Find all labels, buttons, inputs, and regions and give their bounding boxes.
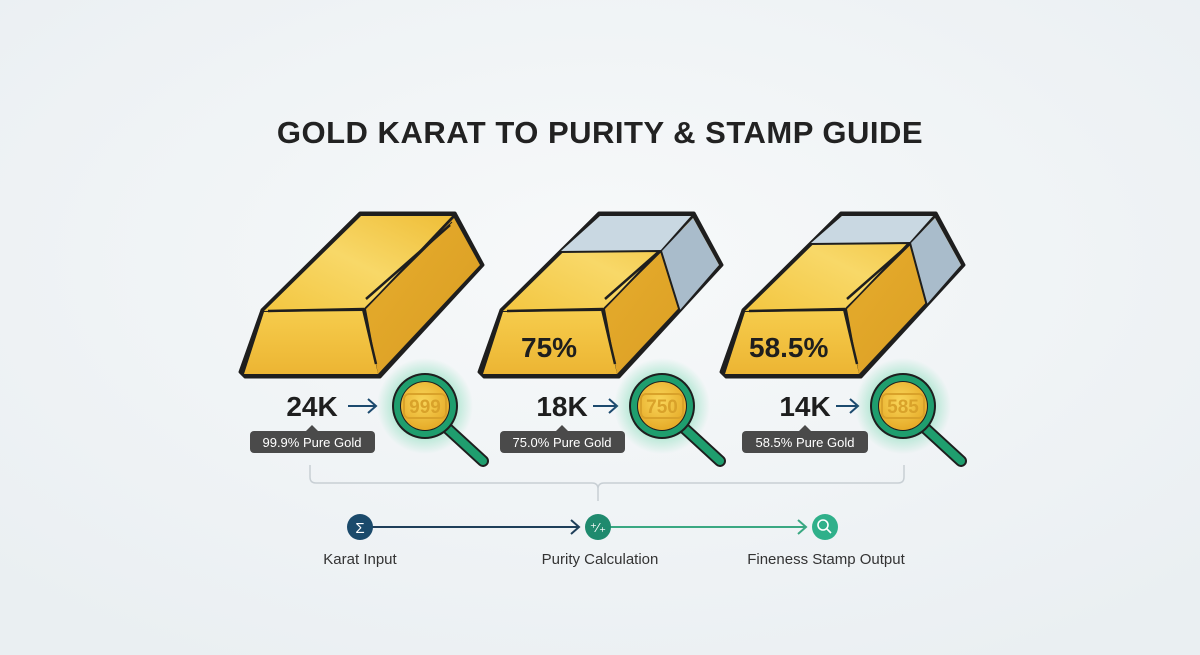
icon: gold bar 14K: 58.5% (749, 332, 828, 363)
panel: 24K bar (240, 213, 483, 461)
tag: 75.0% Pure Gold (500, 425, 625, 453)
icon: calculation (585, 514, 611, 540)
arrow (836, 399, 858, 413)
icon: magnifier 585 (855, 358, 961, 461)
icon: sigma: Σ (355, 520, 365, 537)
panel: 14K bar (721, 213, 964, 461)
tag: 58.5% Pure Gold (742, 425, 868, 453)
icon: search (812, 514, 838, 540)
label: Fineness Stamp Output: Fineness Stamp Output (747, 551, 906, 568)
tag: 58.5% Pure Gold: 58.5% Pure Gold (755, 435, 855, 450)
bracket (310, 465, 904, 501)
arrow (348, 399, 376, 413)
icon: calculation: ⁺∕₊ (590, 520, 606, 535)
tag: 99.9% Pure Gold (250, 425, 375, 453)
icon: sigma (347, 514, 373, 540)
icon: magnifier 750: 750 (646, 397, 678, 418)
panel: 18K bar (479, 213, 722, 461)
label: Karat Input: Karat Input (323, 551, 398, 568)
icon: gold bar 14K (721, 213, 964, 377)
icon: magnifier 999: 999 (409, 397, 441, 418)
arrow (593, 399, 617, 413)
icon: gold bar 18K (479, 213, 722, 377)
title: GOLD KARAT TO PURITY & STAMP GUIDE (277, 115, 923, 150)
label: Purity Calculation: Purity Calculation (542, 551, 658, 568)
icon: gold bar 18K: 75% (521, 332, 577, 363)
icon: magnifier 750 (614, 358, 720, 461)
icon: gold bar 24K (240, 213, 483, 377)
karat label 24K: 24K (286, 391, 338, 422)
tag: 99.9% Pure Gold: 99.9% Pure Gold (262, 435, 362, 450)
icon: magnifier 999 (377, 358, 483, 461)
flow diagram (323, 514, 906, 568)
karat label 14K: 14K (779, 391, 831, 422)
icon: magnifier 585: 585 (887, 397, 919, 418)
karat label 18K: 18K (536, 391, 588, 422)
tag: 75.0% Pure Gold: 75.0% Pure Gold (512, 435, 612, 450)
